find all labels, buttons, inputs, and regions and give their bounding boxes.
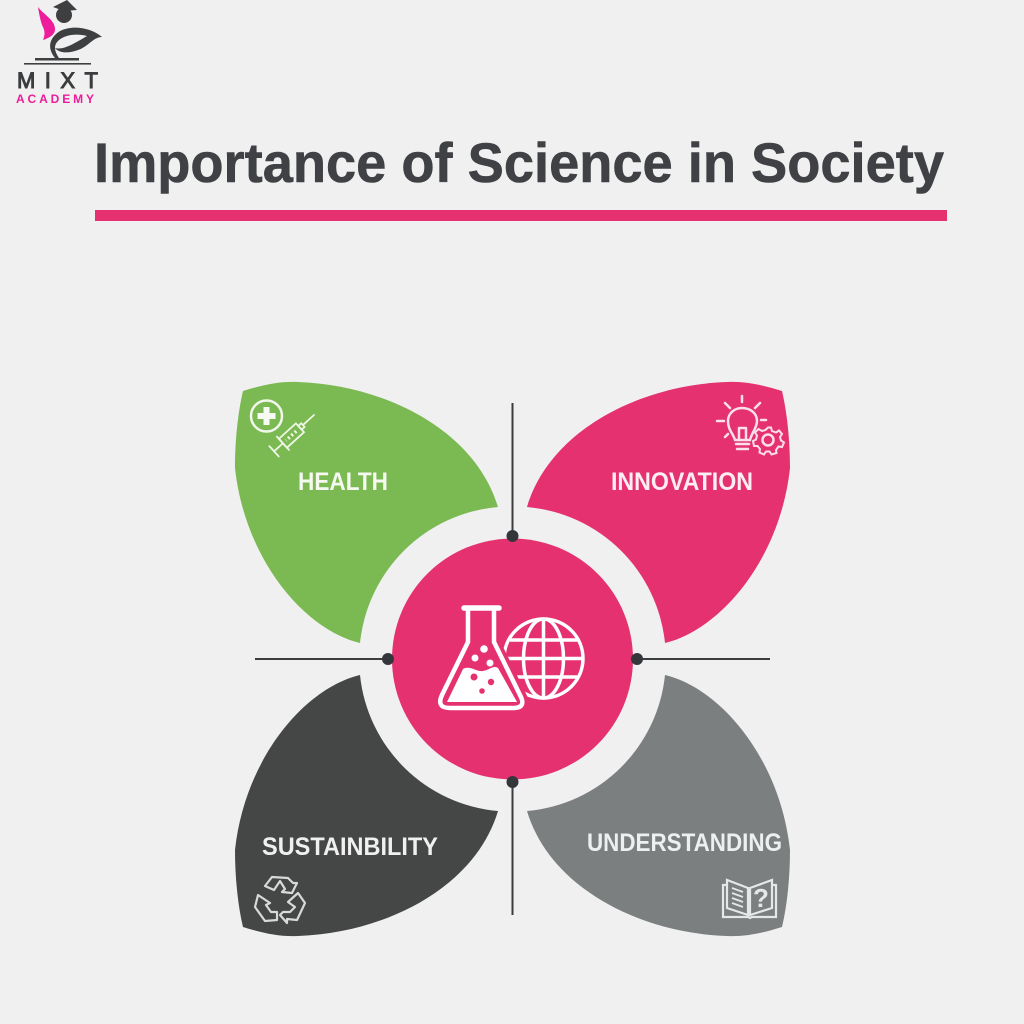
icon: recycling arrows <box>255 877 305 923</box>
leaf shape <box>235 675 498 936</box>
title underline <box>95 210 947 221</box>
logo: Mixt Academy <box>16 0 102 106</box>
title: Importance of Science in Society <box>94 131 944 194</box>
panel: sustainability <box>235 675 498 936</box>
icon: graduate cap and head <box>53 0 77 23</box>
icon: globe <box>504 619 583 698</box>
panel: health <box>235 382 498 643</box>
leaf shape <box>527 382 790 643</box>
question mark: ? <box>753 883 769 913</box>
icon: open book with question mark <box>723 880 776 918</box>
label: SUSTAINBILITY <box>262 833 438 861</box>
logo subtitle: ACADEMY <box>16 92 94 106</box>
logo wordmark: MIXT <box>17 68 98 93</box>
flask bubbles <box>470 674 494 694</box>
panel: innovation <box>527 382 790 643</box>
panel: understanding <box>527 675 790 936</box>
flask liquid <box>447 667 517 702</box>
panel: center circle <box>392 538 633 780</box>
icon: flask <box>440 608 522 708</box>
leaf shape <box>527 675 790 936</box>
label: INNOVATION <box>611 468 753 496</box>
label: HEALTH <box>298 468 388 496</box>
icon: light bulb and gear <box>717 396 784 454</box>
icon: leaf <box>50 28 102 58</box>
label: UNDERSTANDING <box>587 829 782 857</box>
connector lines and dots <box>255 403 770 915</box>
icon: syringe <box>268 408 320 458</box>
icon: pink flame <box>38 7 55 40</box>
icon: medical cross <box>251 400 282 432</box>
leaf shape <box>235 382 498 643</box>
